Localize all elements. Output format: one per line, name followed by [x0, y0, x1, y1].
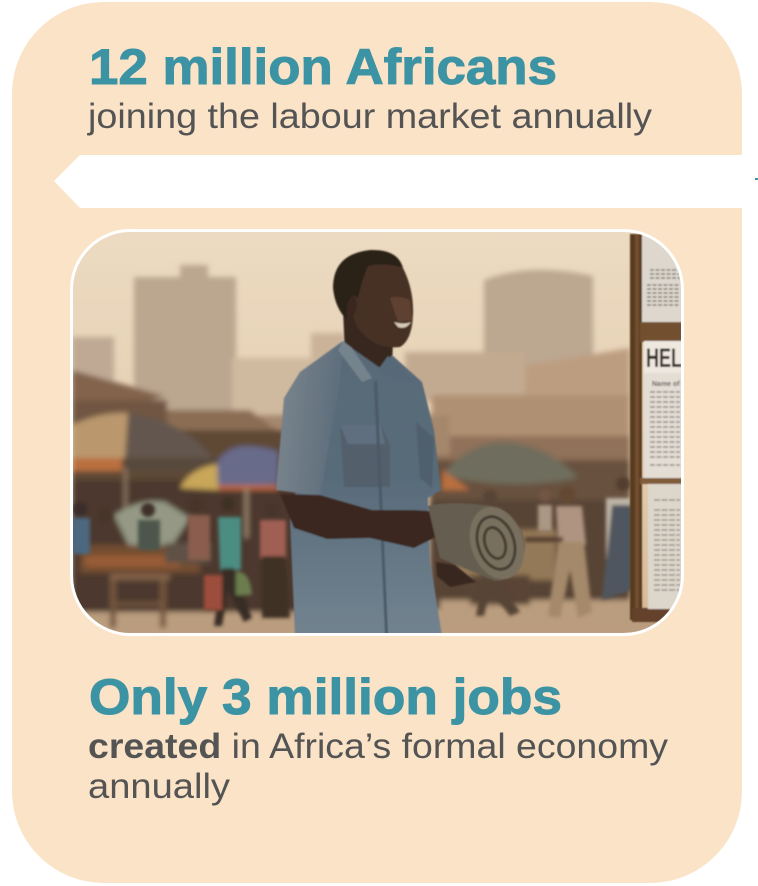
striped umbrella — [180, 464, 218, 490]
market stalls — [80, 545, 200, 573]
photo border — [72, 230, 682, 634]
text: annually: annually — [88, 767, 231, 806]
rolled mat — [428, 503, 525, 581]
shirt torso — [280, 342, 442, 636]
background people — [72, 477, 632, 626]
right umbrella — [442, 442, 578, 484]
heading: Only 3 million jobs: Only 3 million jobs — [89, 669, 562, 725]
photo: man at market with job board — [72, 230, 694, 636]
HELP sign — [644, 341, 682, 374]
job notice board: Name of Ext — [652, 381, 693, 388]
heading: 12 million Africans: 12 million Africans — [89, 39, 557, 95]
small teal mark — [755, 178, 758, 180]
ear — [346, 294, 356, 316]
sky — [73, 232, 648, 608]
man — [276, 250, 533, 636]
text: joining the labour market annually: joining the labour market annually — [87, 97, 653, 136]
smile — [394, 322, 411, 328]
pockets — [340, 425, 390, 487]
warm haze — [72, 231, 682, 634]
white tarp — [114, 501, 190, 548]
white arrow band — [54, 155, 742, 208]
neck — [342, 315, 394, 368]
left hand — [436, 562, 476, 587]
paper 1 — [642, 236, 682, 322]
right forearm and hand — [280, 494, 450, 548]
job notice board: HELP — [646, 343, 694, 373]
collar — [338, 341, 372, 382]
background city and market — [72, 265, 682, 636]
paper 2 — [644, 373, 682, 478]
hair — [333, 250, 403, 320]
large umbrella — [72, 413, 128, 458]
job notice board — [629, 233, 681, 623]
shirt sleeve — [276, 341, 343, 496]
text: created in Africa's formal economy: created in Africa’s formal economy — [88, 727, 669, 766]
head — [349, 263, 413, 347]
paper 3 — [648, 484, 682, 609]
